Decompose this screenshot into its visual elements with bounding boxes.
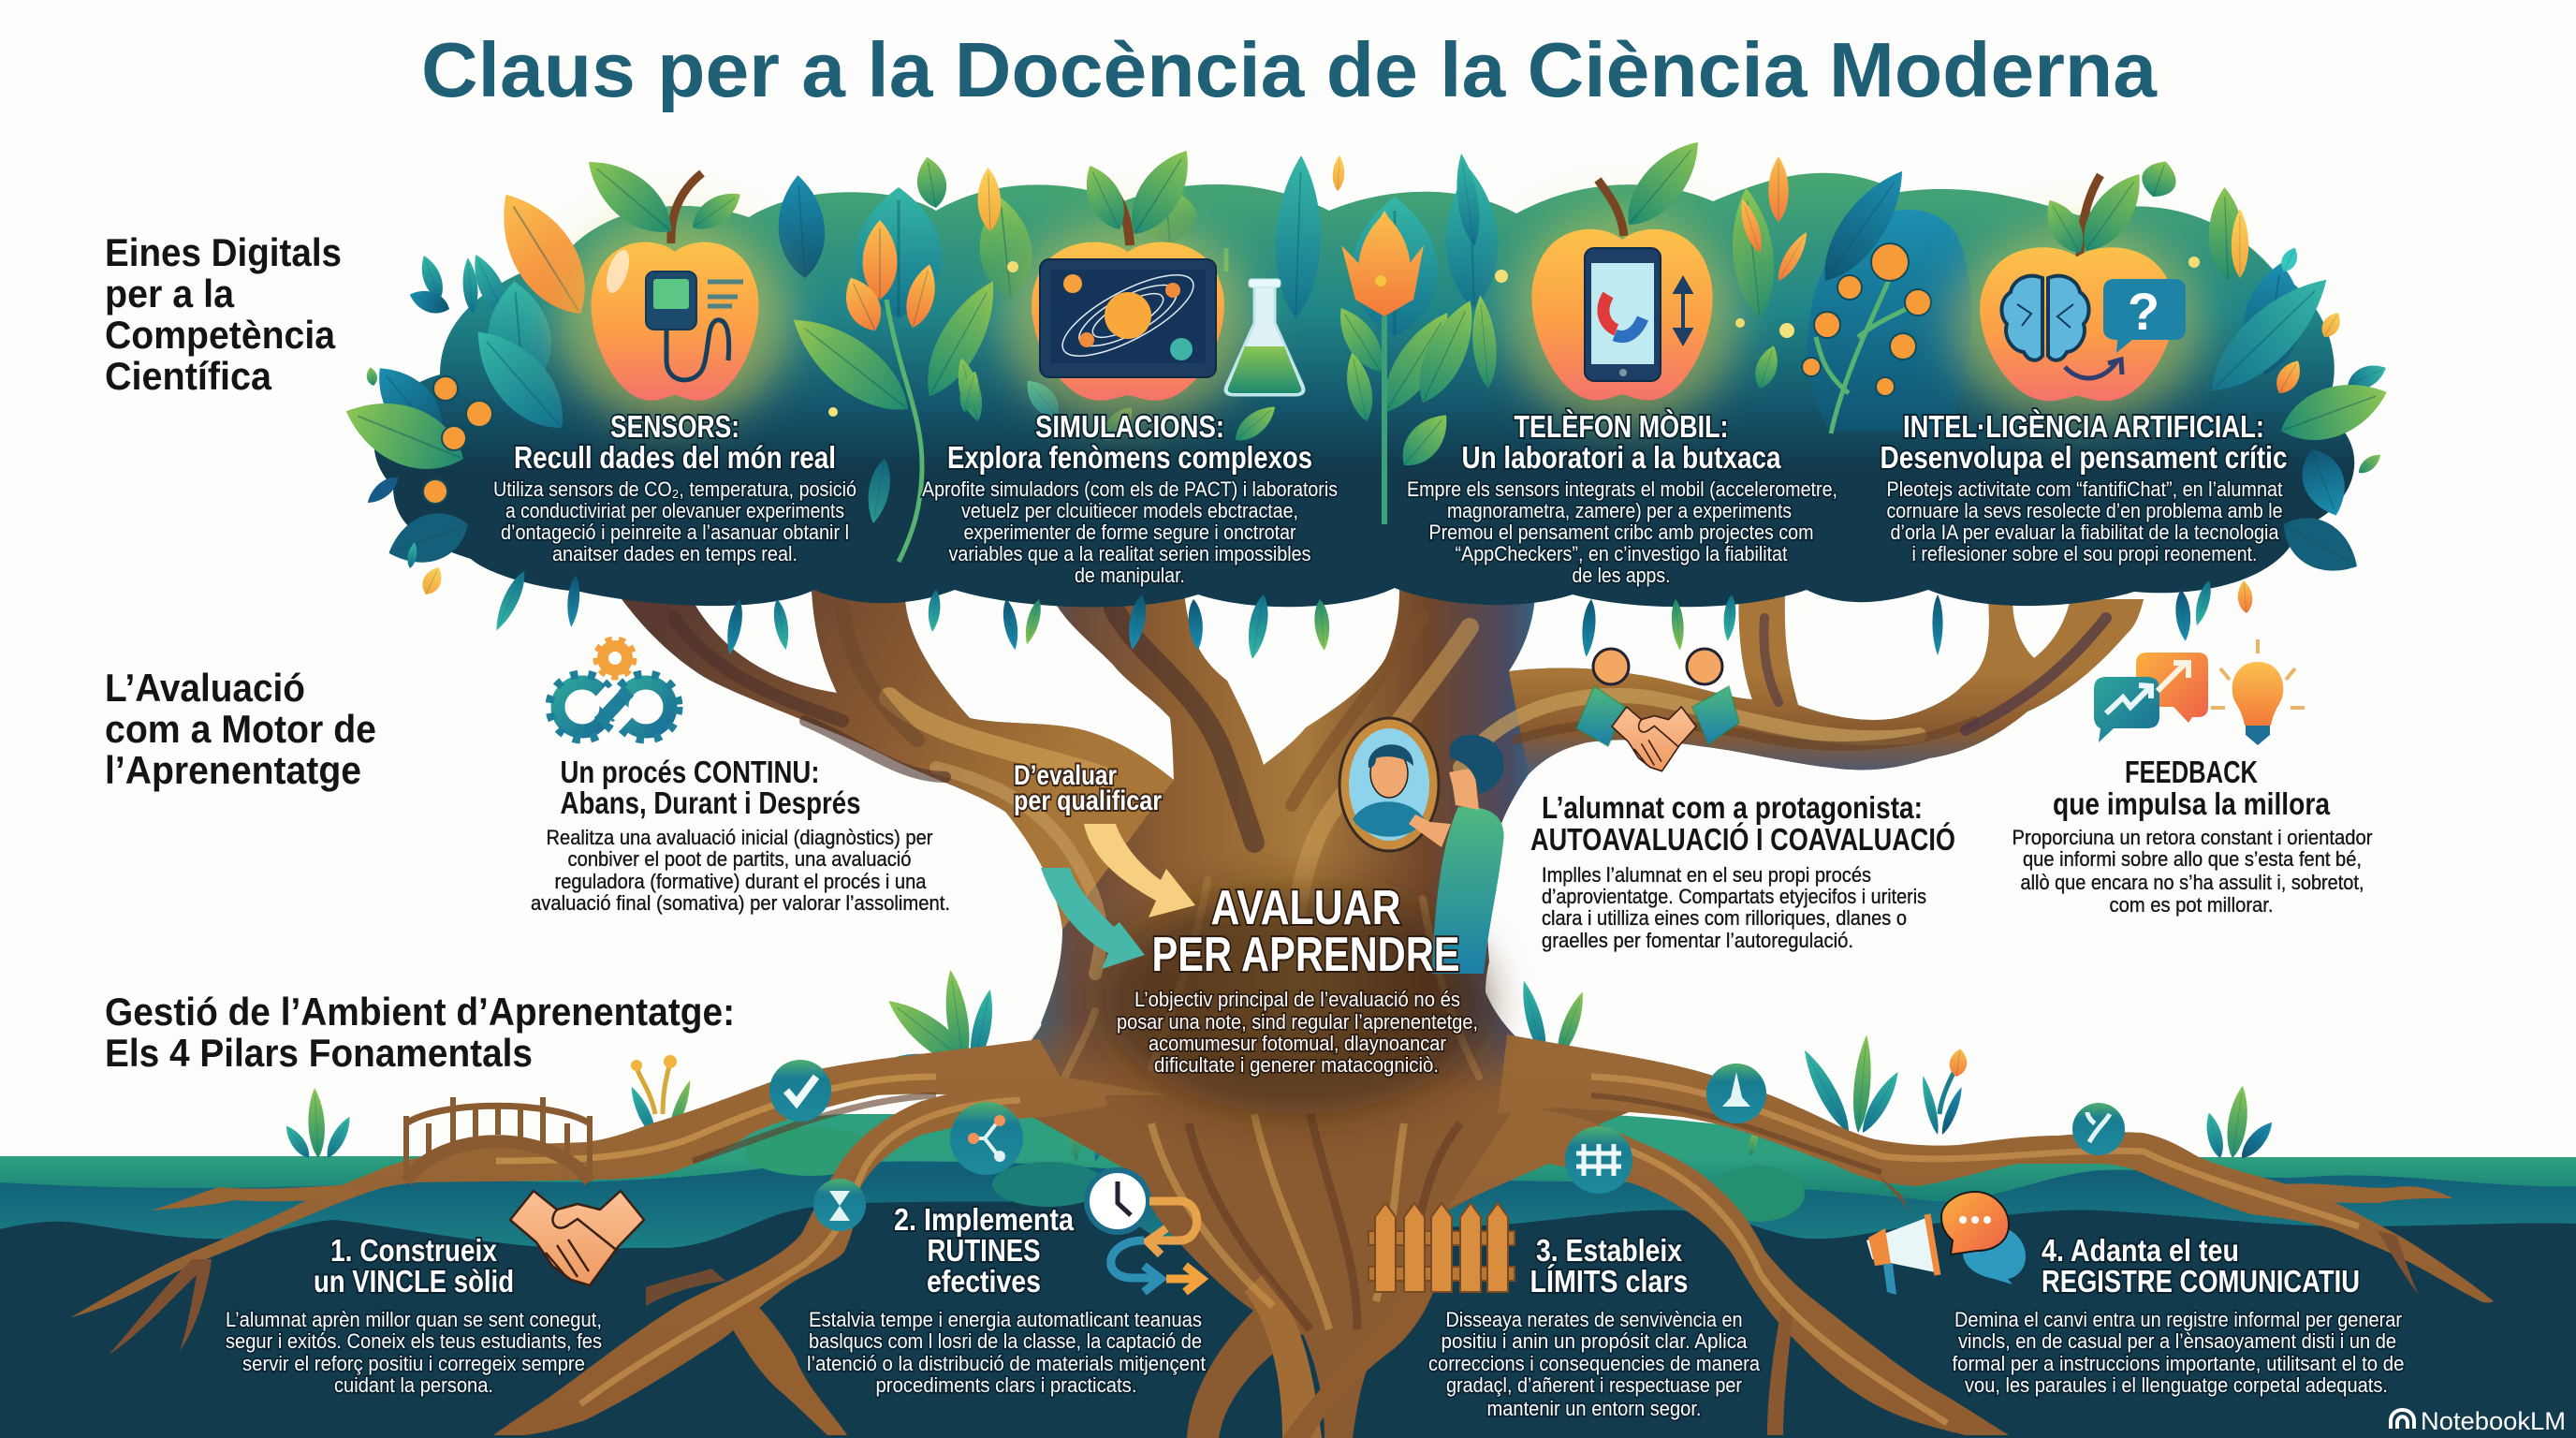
panel: simulations text: Explora fenòmens complexos (947, 440, 1312, 475)
plant: central right (1516, 979, 1589, 1061)
panel: pillar 1: segur i exitós. Coneix els teus estudiants, fes (226, 1329, 602, 1353)
panel: AI text: Pleotejs activitate com “fantifiChat”, en l’alumnat (1887, 477, 2282, 501)
panel: pillar 2: l’atenció o la distribució de materials mitjençent (807, 1352, 1206, 1375)
panel: sensors text: Utiliza sensors de CO₂, temperatura, posició (493, 477, 856, 501)
panel: protagonist (1530, 790, 1955, 952)
central text: avaluar per aprendre: dificultate i generer matacogniciò. (1154, 1053, 1439, 1077)
bubble blue (1963, 1226, 2026, 1284)
panel: continuous process: reguladora (formative) durant el procés i una (554, 870, 927, 893)
panel: pillar 3: gradaçl, d’añerent i respectuase per (1446, 1373, 1742, 1397)
apple: simulations (1002, 140, 1304, 425)
arrow: yellow (1084, 824, 1195, 917)
panel: AI text: i reflesioner sobre el sou propi reonement. (1911, 542, 2258, 565)
panel: AI text: d’orla IA per evaluar la fiabilitat de la tecnologia (1891, 521, 2279, 544)
panel: mobile text: Un laboratori a la butxaca (1462, 440, 1781, 475)
panel: continuous process: Realitza una avaluació inicial (diagnòstics) per (547, 826, 932, 849)
panel: feedback: que informi sobre allo que s’esta fent bé, (2023, 847, 2362, 871)
icon: curved arrow (2065, 360, 2122, 378)
panel: mobile text: Empre els sensors integrats el mobil (accelerometre, (1407, 477, 1837, 501)
apple stem and leaves (2037, 164, 2155, 262)
panel: protagonist: L’alumnat com a protagonista: (1542, 790, 1923, 825)
panel: AI text: Desenvolupa el pensament crític (1880, 440, 2288, 475)
leaves: front layer (335, 152, 2395, 614)
label: d'evaluar per qualificar: per qualificar (1014, 785, 1162, 816)
root: right big (1448, 1108, 2009, 1435)
panel: continuous process (531, 755, 950, 915)
title: Claus per a la Docència de la Ciència Moderna (421, 26, 2158, 113)
student (1409, 735, 1504, 974)
panel: simulations text (922, 409, 1338, 587)
panel: pillar 3 (1428, 1233, 1761, 1420)
root badges (769, 1060, 2125, 1231)
heading: eines digitals: Científica (105, 354, 272, 398)
panel: protagonist: AUTOAVALUACIÓ I COAVALUACIÓ (1530, 822, 1955, 857)
badge: check (769, 1060, 831, 1122)
panel: sensors text: d’ontageció i peinreite a l’asanuar obtanir l (501, 521, 849, 544)
leaves: back layer (362, 154, 2368, 586)
heading: avaluacio (105, 666, 376, 792)
panel: pillar 4: vou, les paraules i el llenguatge corpetal adequats. (1965, 1373, 2388, 1397)
heading: avaluacio: l’Aprenentatge (105, 748, 361, 792)
panel: simulations text: experimenter de forme segure i onctrotar (964, 521, 1295, 544)
icon: mirror with student (1339, 718, 1504, 974)
heading: avaluacio: L’Avaluació (105, 666, 305, 710)
apple stem and leaves (575, 145, 748, 248)
panel: feedback (2012, 755, 2372, 917)
trunk base blend (1011, 992, 1647, 1180)
panel: protagonist: clara i utilliza eines com rilloriques, dlanes o (1542, 906, 1907, 930)
icon: question bubble: ? (2128, 282, 2159, 341)
heading: avaluacio: com a Motor de (105, 707, 376, 751)
panel: sensors text: anaitser dades en temps real. (552, 542, 798, 565)
heading: eines digitals: Competència (105, 313, 336, 357)
panel: pillar 2: baslqucs com l losri de la classe, la captació de (809, 1329, 1202, 1353)
roots (71, 1034, 2494, 1438)
icon: clock and routine arrows (1087, 1170, 1202, 1292)
panel: pillar 3: correccions i consequencies de manera (1428, 1352, 1761, 1375)
tree canopy (335, 152, 2395, 661)
plant: central left big (880, 968, 999, 1083)
icon: flask (1225, 279, 1304, 395)
central text: avaluar per aprendre: L’objectiv principal de l’evaluació no és (1134, 988, 1460, 1011)
teal bubble (2094, 677, 2159, 742)
trunk body (608, 580, 2144, 1180)
panel: pillar 3: LÍMITS clars (1530, 1264, 1689, 1299)
panel: pillar 2: efectives (927, 1264, 1041, 1299)
panel: sensors text: SENSORS: (610, 409, 739, 444)
panel: protagonist: Implles l’alumnat en el seu propi procés (1542, 863, 1871, 887)
heading: gestio: Els 4 Pilars Fonamentals (105, 1031, 533, 1075)
plant: stems (886, 248, 1914, 562)
badge: network (950, 1102, 1023, 1175)
panel: continuous process: Un procés CONTINU: (560, 755, 820, 789)
icon: feedback bubbles and bulb (2094, 639, 2305, 745)
icon: fence (1368, 1203, 1515, 1292)
panel: sensors text (493, 409, 856, 565)
icon: phone with magnet (1585, 248, 1690, 381)
panel: pillar 4: 4. Adanta el teu (2042, 1233, 2239, 1268)
label: d'evaluar per qualificar: D’evaluar (1014, 760, 1117, 791)
icon: megaphone and speech bubbles (1866, 1192, 2026, 1295)
apple stem and leaves (1076, 140, 1204, 245)
panel: mobile text: TELÈFON MÒBIL: (1515, 409, 1728, 444)
panel: pillar 4: vincls, en de casual per a l’ènsaoyament disti i un de (1958, 1329, 2396, 1353)
apple: mobile phone (1505, 129, 1739, 426)
panel: mobile text: de les apps. (1573, 564, 1670, 587)
ground bands (0, 1114, 2576, 1438)
panel: AI text: INTEL·LIGÈNCIA ARTIFICIAL: (1903, 409, 2264, 444)
berries (423, 243, 1931, 504)
central text: avaluar per aprendre: acomumesur fotomual, dlaynoancar (1149, 1032, 1446, 1055)
panel: pillar 3: mantenir un entorn segor. (1486, 1397, 1702, 1420)
icon: handshake vincle (510, 1191, 644, 1285)
panel: continuous process: conbiver el poot de partits, una avaluació (567, 847, 912, 871)
icon: infinity gears (549, 639, 679, 740)
panel: pillar 2: RUTINES (927, 1233, 1041, 1268)
panel: mobile text: Premou el pensament cribc amb projectes com (1428, 521, 1814, 544)
panel: feedback: Proporciuna un retora constant i orientador (2012, 826, 2372, 849)
panel: AI text (1880, 409, 2288, 565)
badge: compass (1706, 1064, 1766, 1123)
panel: pillar 2 (807, 1202, 1206, 1397)
panel: pillar 1: un VINCLE sòlid (314, 1264, 514, 1299)
heading: eines digitals (105, 230, 342, 398)
panel: continuous process: avaluació final (somativa) per valorar l’assoliment. (531, 891, 950, 915)
panel: simulations text: SIMULACIONS: (1035, 409, 1224, 444)
apple: sensors (557, 145, 791, 425)
panel: pillar 3: positiu i anin un propósit clar. Aplica (1442, 1329, 1748, 1353)
plant: orange flower (1341, 211, 1424, 524)
panel: pillar 1: servir el reforç positiu i corregeix sempre (242, 1352, 585, 1375)
heading: eines digitals: per a la (105, 271, 235, 315)
tree trunk and branches (608, 580, 2144, 1180)
trunk dark centre (1105, 889, 1488, 1114)
icon: tablet simulation (1040, 259, 1216, 377)
icon: brain (2001, 276, 2089, 360)
bubble orange (1941, 1192, 2009, 1255)
icon: question bubble (2103, 279, 2186, 353)
panel: AI text: cornuare la sevs resolecte d’en problema amb le (1887, 499, 2282, 522)
panel: feedback: allò que encara no s’ha assulit i, sobretot, (2020, 871, 2364, 894)
root: centre (1105, 1095, 1567, 1438)
panel: pillar 2: Estalvia tempe i energia automatlicant teanuas (809, 1308, 1202, 1331)
panel: pillar 1 (226, 1233, 602, 1397)
apple stem and leaves (1598, 129, 1713, 238)
panel: pillar 3: Disseaya nerates de senvivència en (1445, 1308, 1743, 1331)
panel: protagonist: graelles per fomentar l’autoregulació. (1542, 929, 1853, 952)
heading: gestio (105, 990, 735, 1075)
label: d'evaluar per qualificar (1014, 760, 1162, 816)
panel: pillar 4: formal per a instruccions importante, utilitsant el to de (1953, 1352, 2404, 1375)
plant: right bush (1797, 1034, 1969, 1137)
root: right long (1498, 1034, 2494, 1303)
icon: bridge (406, 1097, 590, 1181)
panel: sensors text: a conductiviriat per olevanuer experiments (505, 499, 844, 522)
root: left middle (493, 1077, 1170, 1435)
panel: pillar 4 (1953, 1233, 2404, 1397)
panel: pillar 3: 3. Estableix (1536, 1233, 1683, 1268)
badge: hourglass (813, 1179, 866, 1231)
logo: notebooklm: NotebookLM (2421, 1407, 2566, 1435)
branch shading: right (1509, 590, 2144, 774)
grass and plants (281, 968, 2277, 1163)
branch shading: left (608, 580, 1174, 930)
central text: avaluar per aprendre: AVALUAR (1211, 881, 1400, 935)
central text: avaluar per aprendre: posar una note, sind regular l’aprenentetge, (1117, 1010, 1478, 1034)
panel: simulations text: de manipular. (1075, 564, 1185, 587)
panel: pillar 1: cuidant la persona. (334, 1373, 493, 1397)
heading: gestio: Gestió de l’Ambient d’Aprenentatge: (105, 990, 735, 1034)
panel: simulations text: variables que a la realitat serien impossibles (949, 542, 1310, 565)
panel: mobile text (1407, 409, 1837, 587)
panel: pillar 4: REGISTRE COMUNICATIU (2042, 1264, 2360, 1299)
arrow: teal (1041, 868, 1145, 969)
plant: right tuft (2203, 1084, 2277, 1163)
panel: protagonist: d’aprovientatge. Compartats etyjecifos i uriteris (1542, 885, 1926, 908)
yellow sparkles (828, 257, 2200, 417)
central text: avaluar per aprendre: PER APRENDRE (1151, 928, 1460, 982)
icon: handshake on branch (1576, 649, 1739, 771)
bulb (2211, 639, 2305, 745)
badge: fence (1565, 1126, 1632, 1194)
root: far left (71, 1039, 1076, 1355)
panel: pillar 1: L’alumnat aprèn millor quan se sent conegut, (226, 1308, 602, 1331)
canopy hanging leaves (490, 568, 2215, 661)
panel: pillar 1: 1. Construeix (330, 1233, 498, 1268)
orange bubble (2136, 653, 2208, 723)
plant: left tuft (281, 1088, 355, 1162)
panel: feedback: que impulsa la millora (2053, 786, 2331, 821)
heading: eines digitals: Eines Digitals (105, 230, 342, 274)
panel: sensors text: Recull dades del món real (514, 440, 836, 475)
panel: pillar 2: procediments clars i practicats. (876, 1373, 1136, 1397)
canopy mass (374, 173, 2354, 607)
apple: artificial intelligence (1951, 164, 2203, 423)
icon: sensor device (646, 271, 743, 380)
plants: mounds inside roots (1065, 1103, 1083, 1162)
badge: sprout (2072, 1103, 2125, 1155)
plant: flower left (626, 1055, 695, 1140)
panel: simulations text: Aprofite simuladors (com els de PACT) i laboratoris (922, 477, 1338, 501)
panel: pillar 4: Demina el canvi entra un registre informal per generar (1954, 1308, 2402, 1331)
panel: pillar 2: 2. Implementa (894, 1202, 1075, 1237)
panel: feedback: com es pot millorar. (2110, 893, 2273, 917)
panel: feedback: FEEDBACK (2125, 755, 2258, 789)
branch highlights (674, 609, 2106, 1095)
central text: avaluar per aprendre (1117, 881, 1478, 1077)
megaphone (1866, 1214, 1939, 1295)
panel: mobile text: magnorametra, zamere) per a experiments (1447, 499, 1792, 522)
mirror (1339, 718, 1439, 851)
panel: simulations text: vetuelz per clcuitiecer models ebctractae, (961, 499, 1298, 522)
panel: continuous process: Abans, Durant i Després (560, 785, 861, 820)
panel: mobile text: “AppCheckers”, en c’investigo la fiabilitat (1455, 542, 1788, 565)
